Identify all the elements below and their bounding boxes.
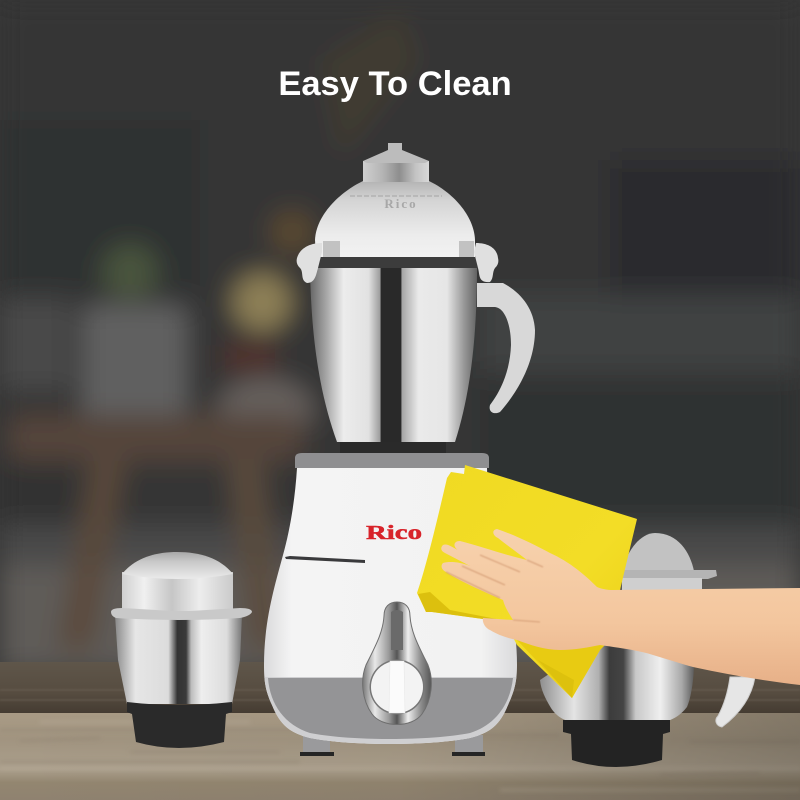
left jar rim xyxy=(111,608,252,620)
right lid clip xyxy=(474,243,498,282)
right lid tab xyxy=(459,241,474,257)
steel jar xyxy=(310,266,477,442)
base housing xyxy=(260,465,520,750)
lid cap xyxy=(363,161,429,182)
foot pads xyxy=(300,752,485,756)
brand logo: Rico xyxy=(366,522,422,544)
right jar dome xyxy=(622,533,694,572)
left jar steel cup xyxy=(115,615,242,704)
vent slot xyxy=(285,556,365,563)
left jar black base xyxy=(127,702,232,748)
right jar handle xyxy=(716,677,755,727)
dome lid xyxy=(315,181,475,258)
left jar lid cylinder xyxy=(122,572,233,612)
right jar steel bowl xyxy=(540,640,694,722)
cloth lower layer xyxy=(517,640,605,698)
cloth fold xyxy=(418,592,512,622)
small jar, right xyxy=(540,533,755,767)
control dial xyxy=(363,602,431,724)
dome measuring mark xyxy=(350,195,442,197)
jar collar xyxy=(340,442,446,455)
small jar, left xyxy=(111,552,252,748)
mixer base xyxy=(260,453,520,756)
finger creases xyxy=(446,555,543,622)
lid top xyxy=(363,143,429,163)
right jar black base xyxy=(563,720,670,767)
jar rim xyxy=(313,257,487,268)
right jar upper steel xyxy=(622,578,702,594)
main mixer jar xyxy=(297,143,535,455)
title: Easy To Clean xyxy=(278,65,512,103)
left lid clip xyxy=(297,243,322,283)
left jar dome lid xyxy=(122,552,233,579)
embossed dome logo: Rico xyxy=(384,196,418,211)
base top plate xyxy=(295,453,489,468)
hand and arm xyxy=(441,529,800,685)
jar handle xyxy=(477,283,535,413)
left foot xyxy=(303,735,330,752)
right foot xyxy=(455,735,483,752)
left lid tab xyxy=(323,241,340,257)
yellow cloth xyxy=(417,465,637,698)
right jar lip xyxy=(621,570,717,579)
